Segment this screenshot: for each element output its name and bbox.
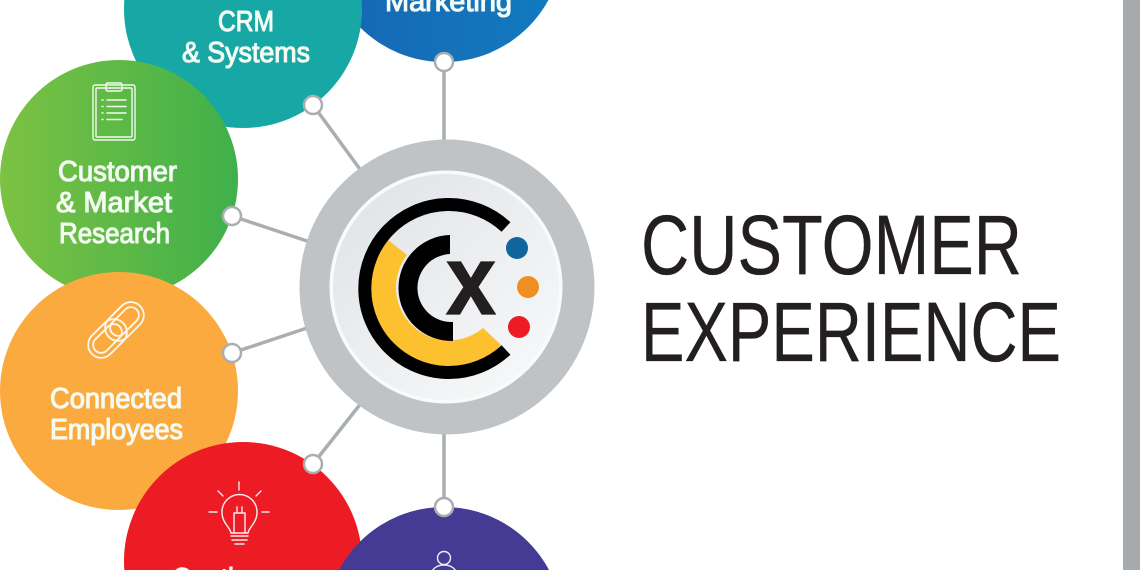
panel: CRM and systems: CRM — [218, 6, 274, 38]
panel: connected employees: Employees — [50, 414, 183, 446]
panel: CRM and systems — [124, 0, 362, 128]
title — [641, 198, 1061, 379]
panel: connected employees — [0, 272, 238, 510]
panel: customer and market research: Research — [59, 218, 170, 250]
panel: marketing — [325, 0, 563, 62]
yellow arc — [367, 240, 501, 370]
panel: purple bottom circle — [325, 507, 563, 570]
letter x: x — [446, 225, 496, 335]
right grey bar — [1123, 0, 1140, 570]
hub: customer experience logo — [300, 140, 594, 434]
icon: person — [431, 552, 457, 570]
outer black arc — [365, 204, 506, 372]
connector lines — [232, 62, 444, 507]
icon: chain link — [83, 297, 149, 363]
panel: customer and market research — [0, 60, 238, 298]
panel: customer and market research: & Market — [56, 187, 172, 219]
dots — [506, 237, 528, 259]
panel: CRM and systems: & Systems — [182, 37, 310, 69]
inner black arc — [398, 235, 453, 341]
title: CUSTOMER — [641, 198, 1022, 292]
panel: connected employees: Connected — [50, 383, 182, 415]
panel: continuous improvement — [124, 442, 362, 570]
icon: light bulb — [209, 482, 269, 544]
panel: customer and market research: Customer — [58, 156, 177, 188]
icon: clipboard — [93, 83, 135, 140]
connector nodes — [223, 53, 453, 516]
